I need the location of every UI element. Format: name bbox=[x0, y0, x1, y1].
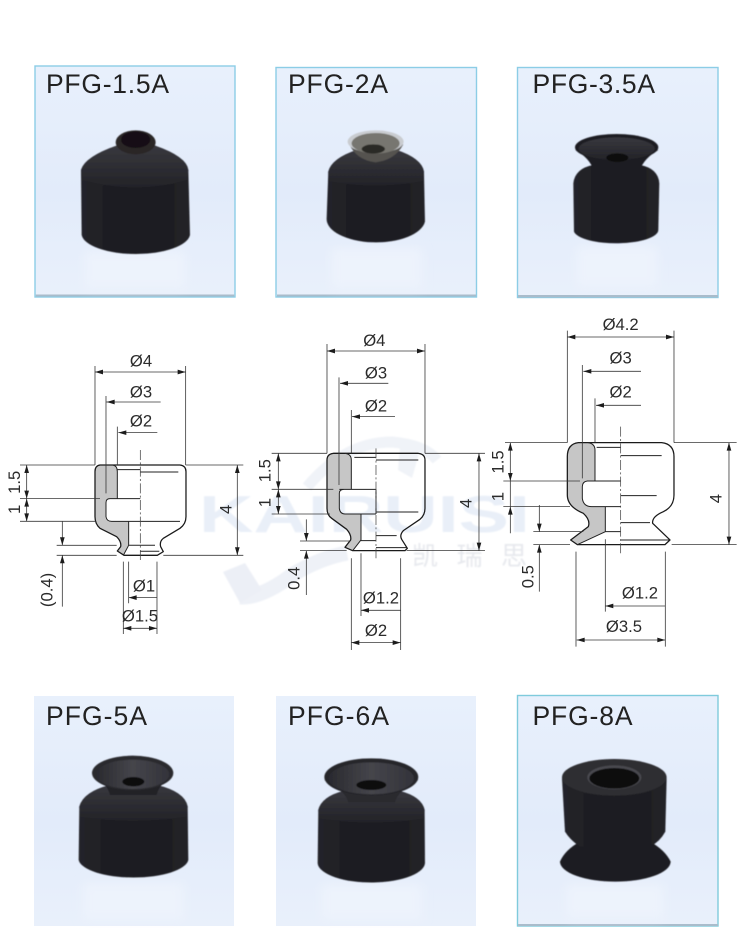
dimension labels: Ø3 bbox=[365, 364, 387, 383]
icon: PFG-3.5A suction cup bbox=[573, 134, 659, 287]
dimension labels: 4 bbox=[707, 494, 726, 503]
dimension labels: Ø3 bbox=[610, 348, 632, 367]
panel: PFG-3.5A product photo bbox=[518, 68, 718, 298]
dimension labels: 0.5 bbox=[518, 565, 537, 588]
dimension labels: 1 bbox=[256, 498, 275, 507]
title: PFG-6A: PFG-6A bbox=[288, 701, 389, 731]
watermark: KAIRUISI logo bbox=[199, 442, 530, 603]
icon: PFG-1.5A suction cup bbox=[81, 130, 190, 288]
dimension labels: Ø4 bbox=[363, 331, 385, 350]
dimension labels: 1.5 bbox=[256, 459, 275, 482]
dimension labels: (0.4) bbox=[38, 573, 57, 607]
panel: PFG-6A product photo bbox=[276, 696, 476, 926]
dimension labels: Ø2 bbox=[610, 383, 632, 402]
dimension labels: 1 bbox=[5, 505, 24, 514]
panel: PFG-5A product photo bbox=[34, 696, 234, 926]
dimension labels: Ø1.2 bbox=[363, 588, 399, 607]
title: PFG-1.5A: PFG-1.5A bbox=[46, 69, 169, 99]
dimension labels: Ø2 bbox=[130, 412, 152, 431]
dimension labels: 1.5 bbox=[5, 471, 24, 494]
cross-section shape bbox=[95, 465, 186, 555]
dimension labels: Ø4.2 bbox=[603, 315, 639, 334]
icon: PFG-2A suction cup bbox=[327, 130, 425, 288]
icon: PFG-5A suction cup bbox=[79, 756, 188, 920]
title: PFG-3.5A: PFG-3.5A bbox=[532, 69, 655, 99]
title: PFG-2A: PFG-2A bbox=[288, 69, 388, 99]
dimension labels: Ø2 bbox=[365, 397, 387, 416]
dimension labels: 1 bbox=[488, 492, 507, 501]
cross-section shape bbox=[327, 453, 425, 551]
watermark: KAIRUISI logo: KAIRUISI bbox=[199, 485, 530, 543]
diagram: PFG-1.5A dimensions bbox=[5, 352, 243, 634]
diagram: PFG-3.5A dimensions bbox=[488, 315, 737, 647]
dimension labels: Ø1.2 bbox=[622, 584, 658, 603]
dimension labels: Ø3.5 bbox=[606, 617, 642, 636]
cross-section shape bbox=[567, 443, 674, 545]
watermark: KAIRUISI logo: 凯瑞思 bbox=[412, 541, 527, 571]
dimension labels: 4 bbox=[457, 499, 476, 508]
title: PFG-8A: PFG-8A bbox=[532, 701, 633, 731]
dimension labels: Ø4 bbox=[130, 352, 152, 371]
panel: PFG-2A product photo bbox=[276, 68, 476, 297]
dimension lines bbox=[20, 366, 243, 634]
dimension labels bbox=[5, 352, 236, 626]
dimension lines bbox=[272, 344, 485, 650]
dimension labels: Ø3 bbox=[130, 383, 152, 402]
dimension labels bbox=[488, 315, 726, 636]
dimension labels: 0.4 bbox=[284, 567, 303, 590]
panel: PFG-8A product photo bbox=[518, 696, 718, 926]
diagram: PFG-2A dimensions bbox=[256, 331, 485, 650]
panel: PFG-1.5A product photo bbox=[35, 66, 235, 297]
dimension labels: Ø1 bbox=[133, 576, 155, 595]
icon: PFG-8A suction cup bbox=[560, 759, 671, 918]
title: PFG-5A: PFG-5A bbox=[46, 701, 147, 731]
dimension labels: 4 bbox=[217, 505, 236, 514]
dimension lines bbox=[503, 331, 737, 647]
icon: PFG-6A suction cup bbox=[318, 758, 425, 920]
dimension labels: Ø1.5 bbox=[122, 607, 158, 626]
dimension labels bbox=[256, 331, 476, 640]
dimension labels: Ø2 bbox=[365, 621, 387, 640]
dimension labels: 1.5 bbox=[488, 450, 507, 474]
